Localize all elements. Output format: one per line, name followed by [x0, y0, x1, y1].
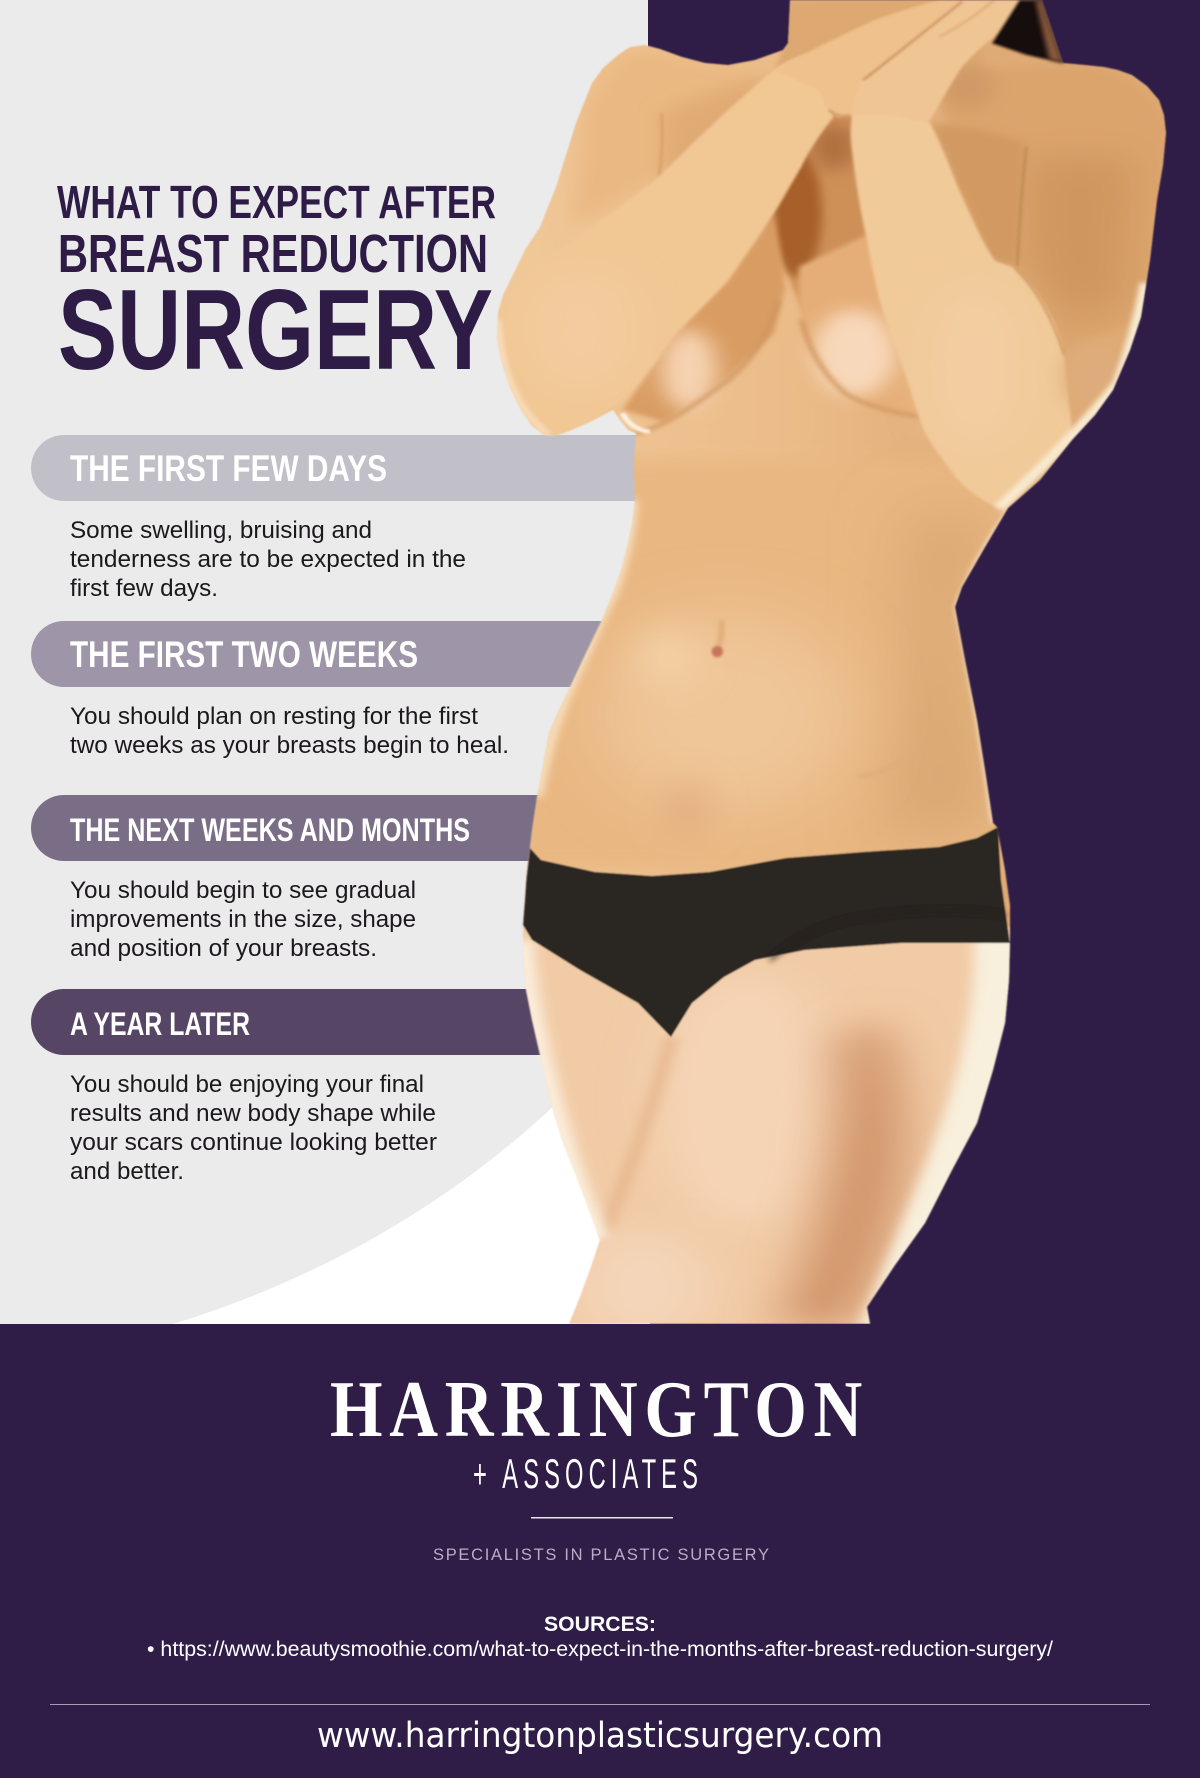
torso right of forearm — [930, 123, 1024, 267]
upper body shading — [497, 0, 1169, 508]
logo divider — [531, 1517, 673, 1518]
footer panel — [0, 1324, 1200, 1778]
navel — [718, 620, 722, 648]
outer arm rim light — [999, 283, 1146, 508]
neck — [776, 0, 922, 66]
right shoulder and upper arm — [948, 74, 1162, 336]
right breast — [795, 235, 881, 338]
section: a year later — [70, 1006, 437, 1185]
section: the next weeks and months — [70, 812, 470, 962]
pill: the next weeks and months — [31, 795, 671, 861]
outer thigh rim light — [854, 934, 1010, 1324]
title: SURGERY — [58, 267, 493, 394]
crease: left armpit — [659, 113, 662, 175]
left shoulder and chest — [574, 53, 726, 218]
section: the first two weeks: THE FIRST TWO WEEKS — [70, 634, 418, 675]
section: the first two weeks: You should plan on resting for the first — [70, 703, 478, 730]
pill: the first two weeks — [31, 621, 671, 687]
elbow crease — [1015, 268, 1064, 355]
section: a year later: and better. — [70, 1158, 184, 1185]
section: the first few days: Some swelling, bruising and — [70, 517, 372, 544]
left breast — [622, 213, 785, 422]
sources — [147, 1613, 1053, 1661]
pill: the first few days — [31, 435, 671, 501]
section: a year later: A YEAR LATER — [70, 1006, 250, 1042]
tagline: SPECIALISTS IN PLASTIC SURGERY — [433, 1546, 769, 1564]
background: light grey panel — [0, 0, 650, 1324]
hair — [992, 0, 1063, 63]
title: BREAST REDUCTION — [58, 224, 488, 284]
back thigh pale rim — [523, 940, 601, 1240]
sources: • https://www.beautysmoothie.com/what-to-expect-in-the-months-after-breast-reduction-surgery/ — [147, 1638, 1053, 1661]
hands — [803, 0, 960, 118]
section: a year later: You should be enjoying your final — [70, 1071, 424, 1098]
section: the next weeks and months: THE NEXT WEEKS AND MONTHS — [70, 812, 470, 848]
cleavage shadow — [786, 115, 866, 304]
section: the next weeks and months: and position of your breasts. — [70, 935, 377, 962]
section: the first few days: tenderness are to be expected in the — [70, 546, 466, 573]
abdomen shading — [518, 460, 1016, 870]
background: purple panel — [648, 0, 1200, 1324]
thigh shading — [522, 926, 1011, 1324]
crease: right armpit — [1017, 147, 1026, 267]
shadow under breasts — [634, 300, 928, 433]
section: the next weeks and months: improvements in the size, shape — [70, 906, 416, 933]
line between thighs — [601, 1037, 671, 1240]
section: the first two weeks — [70, 634, 509, 759]
section: a year later: results and new body shape while — [70, 1100, 436, 1127]
logo: Harrington + Associates: + ASSOCIATES — [473, 1450, 703, 1497]
title — [57, 176, 496, 394]
hip crease — [859, 753, 912, 777]
section: the first few days: first few days. — [70, 575, 218, 602]
title: WHAT TO EXPECT AFTER — [57, 176, 496, 228]
left forearm — [640, 57, 834, 374]
footer divider — [50, 1704, 1150, 1705]
pill: a year later — [31, 989, 671, 1055]
background: white curved swoosh — [173, 1100, 650, 1324]
section: a year later: your scars continue looking better — [70, 1129, 437, 1156]
website: www.harringtonplasticsurgery.com — [317, 1716, 883, 1756]
photo: torso figure — [480, 0, 1200, 1343]
logo: Harrington + Associates — [330, 1366, 869, 1497]
sources: SOURCES: — [544, 1613, 656, 1636]
right forearm — [851, 80, 1072, 508]
section: the next weeks and months: You should begin to see gradual — [70, 877, 416, 904]
section: the first few days — [70, 448, 466, 602]
logo: Harrington + Associates: HARRINGTON — [330, 1366, 869, 1454]
section: the first two weeks: two weeks as your breasts begin to heal. — [70, 732, 509, 759]
section: the first few days: THE FIRST FEW DAYS — [70, 448, 387, 489]
underwear — [523, 827, 1010, 1037]
